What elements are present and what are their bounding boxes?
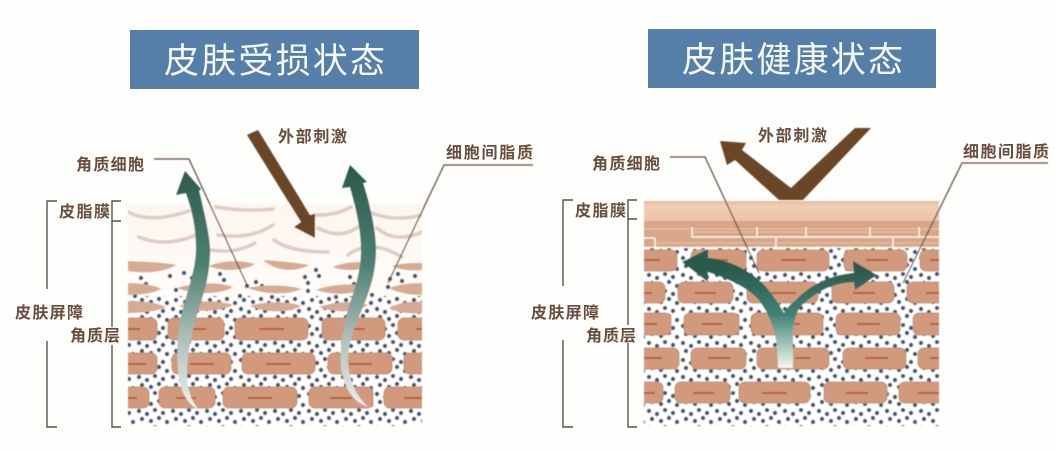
panel: healthy skin diagram [634,128,1048,426]
damaged skin tissue [120,204,434,426]
brackets, healthy [563,200,637,427]
corneocyte bricks [634,250,950,403]
label: sebum film, damaged: 皮脂膜 [59,203,110,221]
label: sebum film, healthy: 皮脂膜 [575,202,626,220]
heading: healthy skin [648,29,936,88]
arrow: moisture escaping right [341,165,376,407]
label: stratum corneum, damaged: 角质层 [70,326,120,345]
sebum film waves [128,207,422,257]
label: external stimulus, healthy: 外部刺激 [758,126,827,145]
stratified upper layer [644,221,939,248]
label: skin barrier, damaged: 皮肤屏障 [15,303,83,322]
arrow: external stimulus deflected [720,128,871,200]
label: stratum corneum, healthy: 角质层 [586,326,636,345]
label: skin barrier, healthy: 皮肤屏障 [531,303,599,322]
sebum film band [644,201,939,221]
leader: intercellular lipid [903,163,1048,283]
arrow: moisture retained, split [682,249,877,368]
label: external stimulus, damaged: 外部刺激 [278,127,347,146]
arrow: external stimulus entering [247,130,315,238]
leader: corneocyte [670,157,759,273]
leader: intercellular lipid [388,165,533,283]
label: corneocyte, healthy: 角质细胞 [592,154,660,173]
label: intercellular lipid, healthy: 细胞间脂质 [963,142,1049,161]
label: intercellular lipid, damaged: 细胞间脂质 [446,143,533,162]
panel: damaged skin diagram [120,130,533,426]
heading: damaged skin [130,30,419,89]
label: corneocyte, damaged: 角质细胞 [76,155,144,174]
heading: damaged skin: 皮肤受损状态 [164,42,385,81]
arrow: moisture escaping left [176,171,210,410]
detached flakes [128,260,422,313]
healthy skin tissue [634,201,950,426]
corneocyte bricks [120,318,434,408]
brackets, damaged [47,201,121,427]
heading: healthy skin: 皮肤健康状态 [682,41,903,80]
leader: corneocyte [154,159,247,285]
